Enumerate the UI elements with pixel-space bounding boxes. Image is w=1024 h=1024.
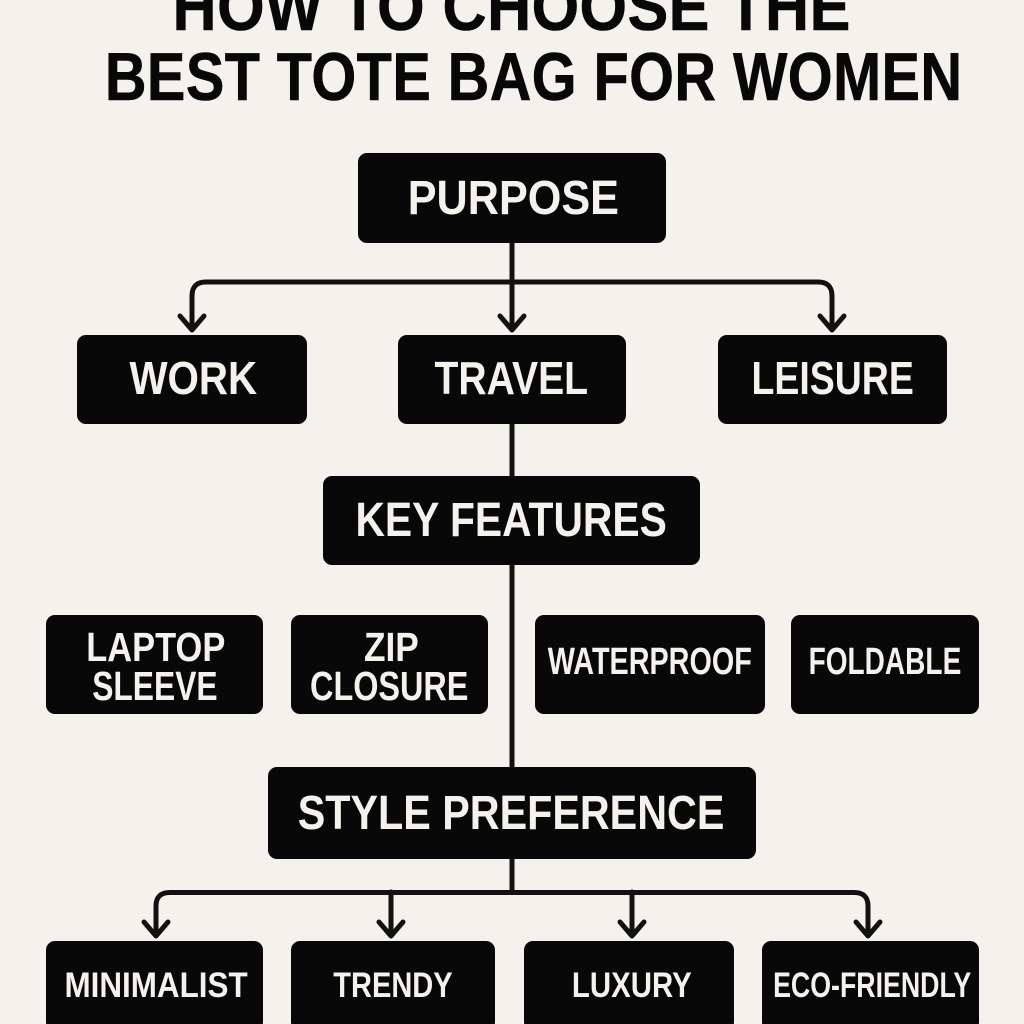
box: travel: [398, 335, 626, 424]
box: foldable: [791, 615, 979, 714]
box: work: WORK: [130, 352, 257, 404]
box: leisure: [718, 335, 947, 424]
box: luxury: LUXURY: [572, 966, 691, 1005]
box: waterproof: [535, 615, 765, 714]
box: style preference: [268, 767, 756, 859]
box: trendy: [291, 941, 495, 1024]
title: BEST TOTE BAG FOR WOMEN: [105, 39, 962, 115]
title: [105, 0, 962, 115]
box: trendy: TRENDY: [333, 966, 453, 1005]
box: zip closure: [291, 615, 488, 714]
box: foldable: FOLDABLE: [808, 640, 961, 682]
box: eco-friendly: [762, 941, 979, 1024]
box: waterproof: WATERPROOF: [548, 640, 752, 682]
box: laptop sleeve: [46, 615, 263, 714]
box: eco-friendly: ECO-FRIENDLY: [773, 966, 971, 1005]
box: travel: TRAVEL: [434, 352, 588, 404]
box: laptop sleeve: LAPTOP: [86, 624, 225, 670]
box: laptop sleeve: SLEEVE: [92, 662, 217, 708]
box: leisure: LEISURE: [751, 352, 914, 404]
box: zip closure: CLOSURE: [310, 662, 469, 708]
box: purpose: [358, 153, 666, 243]
box: key features: KEY FEATURES: [356, 494, 667, 547]
box: purpose: PURPOSE: [407, 172, 619, 224]
box: style preference: STYLE PREFERENCE: [298, 786, 724, 840]
box: minimalist: MINIMALIST: [65, 966, 248, 1005]
box: work: [77, 335, 307, 424]
box: key features: [323, 476, 700, 565]
box: luxury: [524, 941, 734, 1024]
box: zip closure: ZIP: [364, 624, 418, 670]
box: minimalist: [46, 941, 263, 1024]
